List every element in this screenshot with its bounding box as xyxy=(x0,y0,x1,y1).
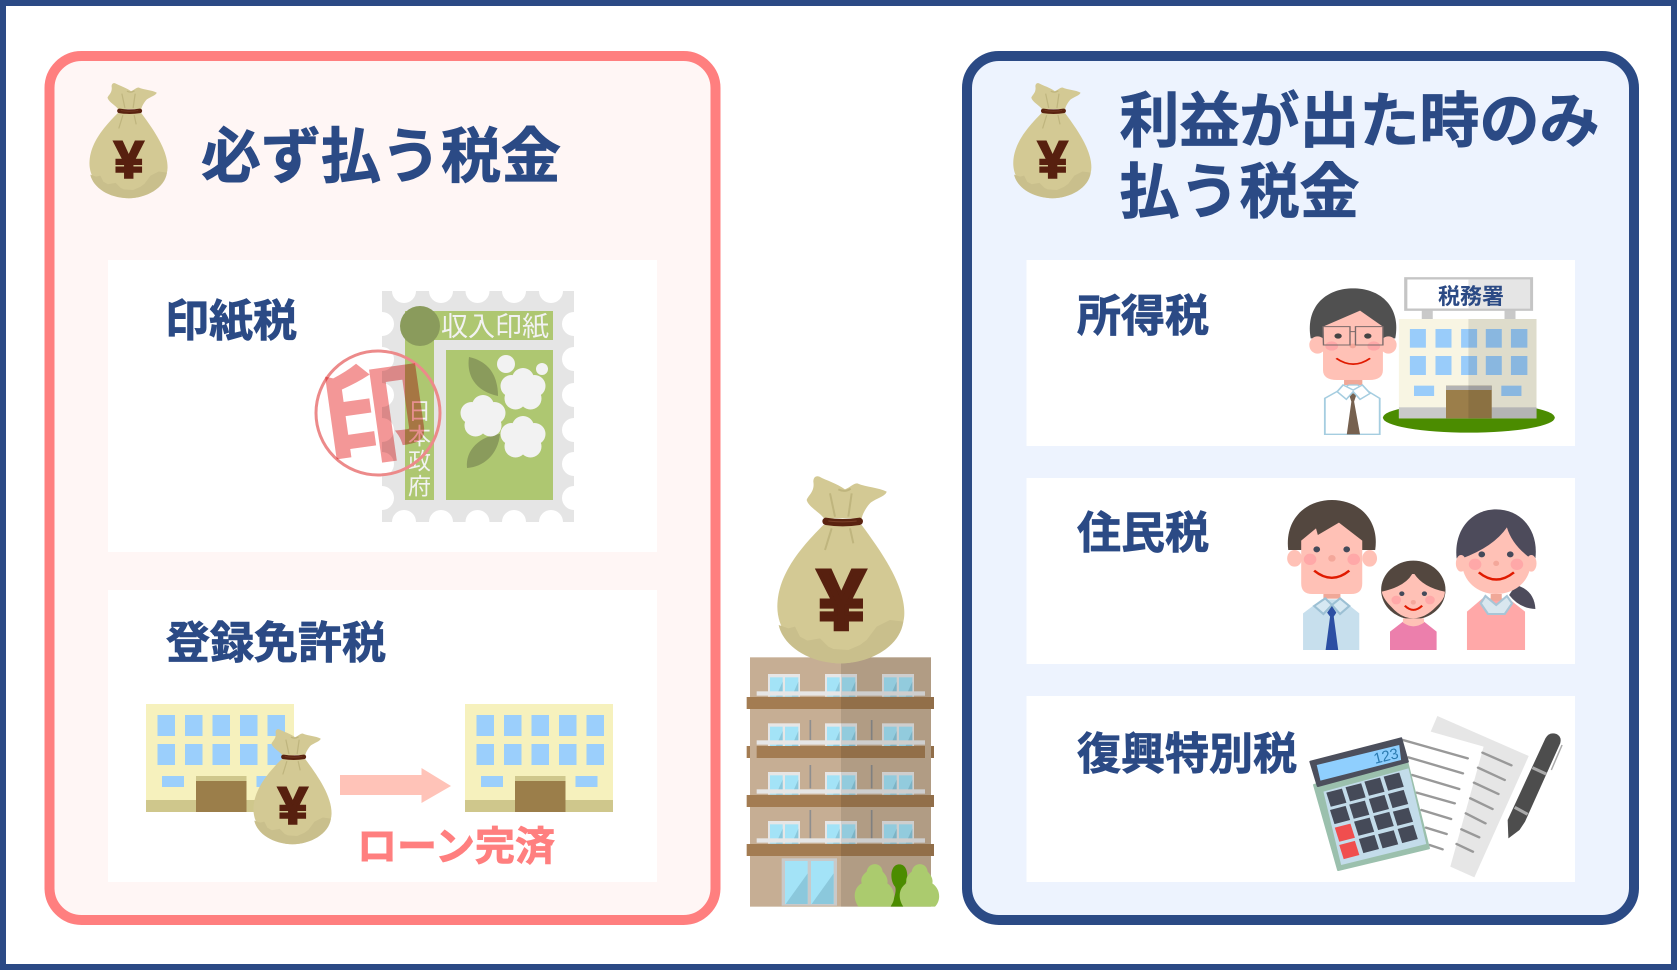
label: resident tax: 住民税 xyxy=(1077,509,1209,558)
illustration: apartment with money bag xyxy=(747,476,939,907)
icon: big money bag xyxy=(777,476,904,663)
icon: documents, calculator and pen xyxy=(1310,716,1562,877)
panel: taxes always paid xyxy=(50,56,716,920)
label: reconstruction special tax: 復興特別税 xyxy=(1077,730,1297,779)
heading: always paid: 必ず払う税金 xyxy=(201,124,561,190)
panel: taxes paid only on profit xyxy=(967,56,1634,920)
icon: big money bag: ¥ xyxy=(818,553,865,648)
icon: apartment building xyxy=(747,657,939,907)
icon: building before xyxy=(146,704,294,812)
heading: paid only on profit: 利益が出た時のみ xyxy=(1120,88,1600,155)
icon: man with glasses xyxy=(1309,288,1397,434)
icon: tax office xyxy=(1383,278,1555,433)
calculator display text: 123 xyxy=(1372,745,1400,768)
icon: revenue stamp: 本 xyxy=(408,423,431,449)
heading: paid only on profit: 払う税金 xyxy=(1120,159,1360,226)
icon: money bag: ¥ xyxy=(1038,131,1067,189)
card: registration tax xyxy=(108,590,657,882)
icon: money bag xyxy=(89,83,168,198)
icon: revenue stamp: 日 xyxy=(408,398,431,424)
icon: revenue stamp: 府 xyxy=(408,473,431,499)
icon: family xyxy=(1287,500,1537,650)
label: registration tax: 登録免許税 xyxy=(166,619,386,668)
icon: revenue stamp: 収入印紙 xyxy=(441,312,549,342)
card: income tax xyxy=(1026,260,1575,446)
icon: revenue stamp: 政 xyxy=(408,448,431,474)
card: stamp tax xyxy=(108,260,657,552)
icon: money bag on building: ¥ xyxy=(278,777,307,835)
icon: money bag: ¥ xyxy=(114,131,143,189)
sign text: 税務署 xyxy=(1438,284,1504,309)
card: reconstruction special tax xyxy=(1026,696,1575,882)
card: resident tax xyxy=(1026,478,1575,664)
label: income tax: 所得税 xyxy=(1077,292,1209,341)
icon: money bag xyxy=(1013,83,1091,198)
icon: red seal: 印 xyxy=(315,351,436,483)
icon: building after xyxy=(465,704,613,812)
label: stamp tax: 印紙税 xyxy=(165,297,297,346)
arrow xyxy=(340,768,451,803)
label: loan repaid: ローン完済 xyxy=(357,825,555,869)
icon: money bag on building xyxy=(253,729,332,844)
icon: revenue stamp xyxy=(370,279,586,534)
